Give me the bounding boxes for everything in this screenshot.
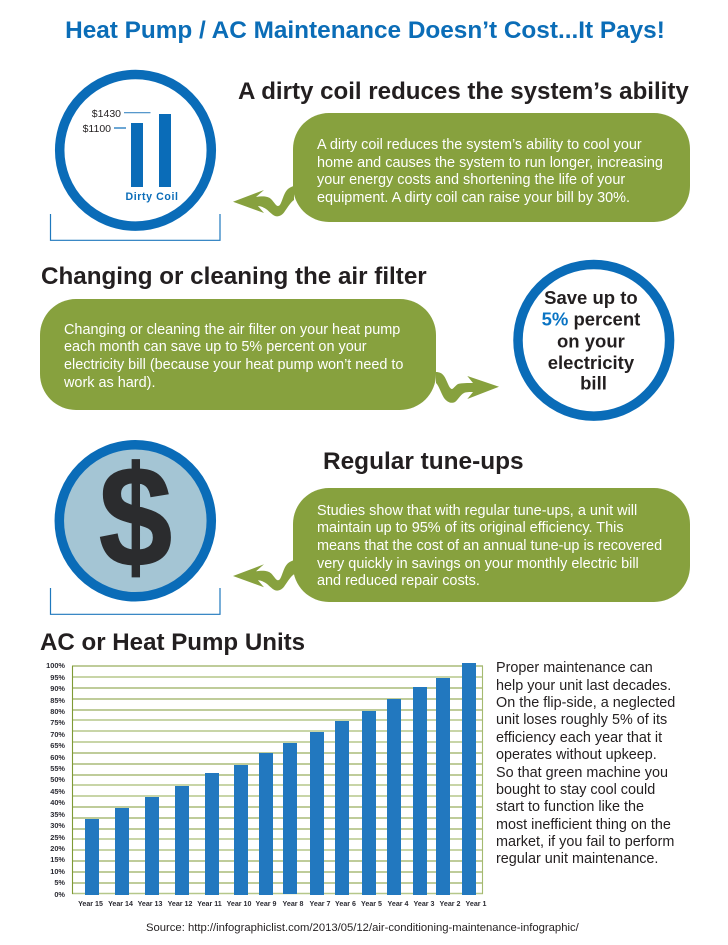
text: dirty coil body bbox=[317, 137, 663, 206]
chart y-axis labels: 35% bbox=[50, 810, 65, 819]
chart x-axis labels: Year 2 bbox=[440, 900, 461, 908]
title: Heat Pump / AC Maintenance Doesn’t Cost...It Pays! bbox=[65, 17, 665, 44]
text: air filter body: each month can save up to 5% percent on your bbox=[64, 339, 367, 355]
chart x-axis labels: Year 11 bbox=[197, 900, 222, 908]
chart y-axis labels: 0% bbox=[54, 890, 65, 899]
text: tune-ups body: maintain up to 95% of its original efficiency. This bbox=[317, 520, 624, 536]
icon: dirty coil circle: Dirty Coil bbox=[125, 191, 179, 203]
text: tune-ups body: means that the cost of an annual tune-up is recovered bbox=[317, 538, 662, 554]
bar chart: efficiency by year bbox=[46, 661, 487, 908]
chart grid bbox=[72, 666, 483, 894]
text: maintenance explanation: most inefficient thing on the bbox=[496, 817, 671, 833]
chart x-axis labels bbox=[78, 900, 487, 908]
chart y-axis labels: 50% bbox=[50, 775, 65, 784]
chart y-axis labels: 75% bbox=[50, 718, 65, 727]
chart y-axis labels bbox=[46, 661, 65, 899]
text: maintenance explanation: Proper maintenance can bbox=[496, 660, 653, 676]
text: tune-ups body bbox=[317, 503, 662, 589]
icon: savings circle: Save up to bbox=[544, 287, 638, 308]
bracket: dollar bbox=[50, 588, 220, 614]
chart y-axis labels: 55% bbox=[50, 764, 65, 773]
text: maintenance explanation: unit loses roughly 5% of its bbox=[496, 712, 667, 728]
icon: savings circle bbox=[518, 264, 670, 416]
text: tune-ups body: and reduced repair costs. bbox=[317, 573, 480, 589]
text: maintenance explanation: help your unit last decades. bbox=[496, 678, 671, 694]
icon: savings circle: 5% percent bbox=[542, 308, 640, 330]
chart y-axis labels: 20% bbox=[50, 844, 65, 853]
arrow: dirty coil bbox=[233, 186, 294, 216]
chart y-axis labels: 30% bbox=[50, 821, 65, 830]
chart y-axis labels: 5% bbox=[54, 878, 65, 887]
chart x-axis labels: Year 1 bbox=[466, 900, 487, 908]
chart y-axis labels: 90% bbox=[50, 684, 65, 693]
text: maintenance explanation: bought to stay cool could bbox=[496, 782, 655, 798]
text: maintenance explanation bbox=[496, 660, 675, 867]
chart x-axis labels: Year 3 bbox=[414, 900, 435, 908]
icon: savings circle: electricity bbox=[548, 352, 635, 373]
text: tune-ups body: very quickly in savings on your monthly electric bill bbox=[317, 556, 639, 572]
text: maintenance explanation: market, if you fail to perform bbox=[496, 834, 674, 850]
panel: air filter text bbox=[40, 299, 436, 410]
heading: units chart: AC or Heat Pump Units bbox=[40, 629, 305, 656]
chart y-axis labels: 10% bbox=[50, 867, 65, 876]
text: dirty coil body: equipment. A dirty coil can raise your bill by 30%. bbox=[317, 190, 630, 206]
heading: dirty coil: A dirty coil reduces the system’s ability bbox=[238, 78, 689, 105]
chart x-axis labels: Year 12 bbox=[168, 900, 192, 908]
bracket: dirty coil bbox=[50, 214, 220, 240]
chart bars bbox=[85, 663, 476, 895]
chart x-axis labels: Year 8 bbox=[283, 900, 304, 908]
chart x-axis labels: Year 7 bbox=[310, 900, 331, 908]
chart y-axis labels: 40% bbox=[50, 798, 65, 807]
chart y-axis labels: 60% bbox=[50, 753, 65, 762]
icon: savings circle: bill bbox=[580, 372, 607, 394]
text: maintenance explanation: On the flip-side, a neglected bbox=[496, 695, 675, 711]
text: air filter body: electricity bill (because your heat pump won’t need to bbox=[64, 357, 403, 373]
text: dirty coil body: A dirty coil reduces the system’s ability to cool your bbox=[317, 137, 642, 153]
chart x-axis labels: Year 15 bbox=[78, 900, 103, 908]
text: air filter body: Changing or cleaning the air filter on your heat pump bbox=[64, 322, 400, 338]
source: Source: http://infographiclist.com/2013/05/12/air-conditioning-maintenance-infographic/ bbox=[146, 922, 579, 934]
icon: dirty coil circle: $1100 bbox=[83, 123, 111, 135]
chart x-axis labels: Year 5 bbox=[361, 900, 382, 908]
chart y-axis labels: 100% bbox=[46, 661, 65, 670]
chart y-axis labels: 15% bbox=[50, 855, 65, 864]
heading: tune-ups: Regular tune-ups bbox=[323, 448, 524, 475]
chart x-axis labels: Year 10 bbox=[227, 900, 251, 908]
chart y-axis labels: 45% bbox=[50, 787, 65, 796]
chart y-axis labels: 95% bbox=[50, 673, 65, 682]
arrow: air filter bbox=[436, 372, 499, 403]
heading: air filter: Changing or cleaning the air filter bbox=[41, 263, 427, 290]
arrow: tune-ups bbox=[233, 560, 294, 591]
text: maintenance explanation: efficiency each year that it bbox=[496, 730, 662, 746]
text: air filter body: work as hard). bbox=[64, 375, 155, 391]
icon: savings circle: on your bbox=[557, 330, 625, 352]
panel: tune-ups text bbox=[293, 488, 690, 602]
text: maintenance explanation: operates without upkeep. bbox=[496, 747, 657, 763]
text: maintenance explanation: So that green machine you bbox=[496, 765, 668, 781]
chart x-axis labels: Year 6 bbox=[335, 900, 356, 908]
chart y-axis labels: 80% bbox=[50, 707, 65, 716]
chart x-axis labels: Year 9 bbox=[256, 900, 277, 908]
chart y-axis labels: 25% bbox=[50, 833, 65, 842]
chart x-axis labels: Year 13 bbox=[138, 900, 162, 908]
chart y-axis labels: 70% bbox=[50, 730, 65, 739]
text: maintenance explanation: regular unit maintenance. bbox=[496, 851, 658, 867]
icon: dollar circle: $ bbox=[99, 438, 172, 597]
text: dirty coil body: home and causes the system to run longer, increasing bbox=[317, 155, 663, 171]
icon: dollar circle bbox=[59, 438, 211, 597]
panel: dirty coil text bbox=[293, 113, 690, 222]
chart y-axis labels: 85% bbox=[50, 696, 65, 705]
chart x-axis labels: Year 4 bbox=[388, 900, 409, 908]
chart x-axis labels: Year 14 bbox=[108, 900, 133, 908]
text: air filter body bbox=[64, 322, 403, 391]
icon: dirty coil circle: $1430 bbox=[92, 108, 121, 120]
text: maintenance explanation: start to function like the bbox=[496, 799, 644, 815]
text: tune-ups body: Studies show that with regular tune-ups, a unit will bbox=[317, 503, 637, 519]
chart y-axis labels: 65% bbox=[50, 741, 65, 750]
icon: dirty coil circle bbox=[60, 74, 211, 226]
text: dirty coil body: your energy costs and shortening the life of your bbox=[317, 172, 625, 188]
